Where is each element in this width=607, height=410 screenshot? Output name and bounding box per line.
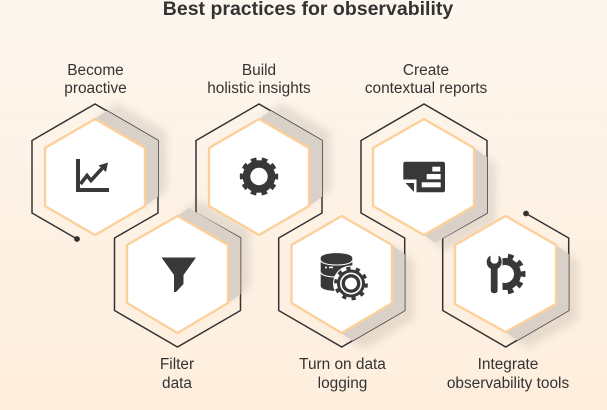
- icon: database with gear: [321, 253, 369, 302]
- label: build holistic insights: holistic insights: [207, 80, 311, 97]
- label: integrate observability tools: Integrate: [478, 356, 538, 373]
- icon: gear: [242, 160, 276, 194]
- panel: become proactive: [45, 103, 167, 235]
- panel: build holistic insights: [209, 103, 331, 235]
- label: create contextual reports: contextual reports: [365, 80, 487, 97]
- panel: create contextual reports: [373, 119, 496, 251]
- label: turn on data logging: Turn on data: [299, 356, 386, 373]
- icon: funnel: [162, 258, 196, 292]
- label: turn on data logging: logging: [318, 375, 367, 392]
- connector line with end dots: [32, 104, 569, 347]
- icon: line chart: [76, 159, 109, 192]
- panel: integrate observability tools: [455, 216, 578, 348]
- label: create contextual reports: Create: [403, 62, 449, 79]
- label: become proactive: proactive: [64, 80, 127, 97]
- panel: filter data: [127, 200, 250, 333]
- label: integrate observability tools: observability tools: [447, 375, 569, 392]
- label: build holistic insights: Build: [242, 62, 276, 79]
- label: filter data: data: [162, 375, 192, 392]
- icon: report card: [403, 162, 445, 192]
- icon: wrench and gear: [487, 256, 523, 293]
- panel: turn on data logging: [292, 216, 414, 349]
- label: filter data: Filter: [160, 356, 194, 373]
- label: become proactive: Become: [67, 62, 124, 79]
